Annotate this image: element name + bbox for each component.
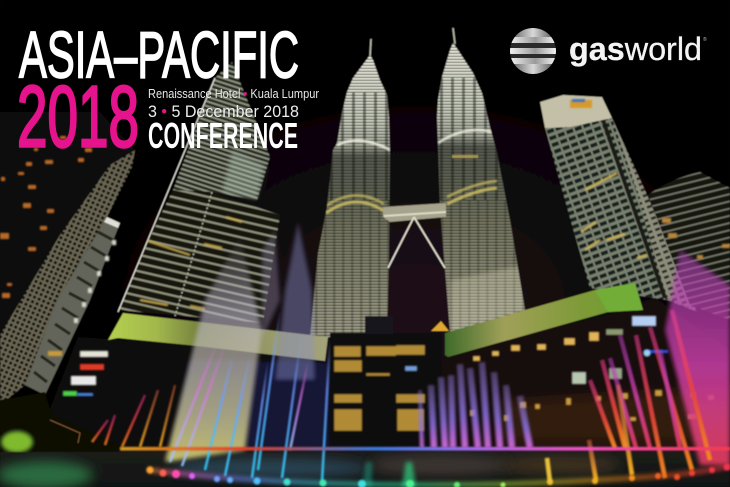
podium: left dark mall block [48, 337, 330, 452]
venue line: Renaissance Hotel • Kuala Lumpur [148, 86, 320, 101]
Petronas tower right [436, 27, 526, 332]
fountain: glow under the nozzle ring [148, 466, 730, 485]
building: central-left glass skyscraper [118, 62, 280, 323]
Petronas tower left [310, 38, 391, 338]
icon: gasworld striped globe [510, 28, 556, 74]
building: left tower grid facade [0, 150, 135, 405]
building: far-right round tower [648, 172, 730, 320]
fountain: right magenta plume [665, 250, 730, 465]
podium: right building with green roof [442, 283, 730, 452]
logo wordmark: gasworld: gasworld [569, 31, 702, 67]
building: left stepped side block [25, 217, 120, 395]
building: far-left dark tower with orange windows [0, 112, 135, 340]
skybridge with V supports [383, 203, 446, 268]
registered mark: ® [703, 36, 707, 43]
shoreline foliage with green lamp [0, 392, 120, 458]
fountain: left coloured jets [92, 310, 330, 482]
title: ASIA-PACIFIC: ASIA–PACIFIC [19, 18, 299, 92]
fountain: right red and orange jets [547, 310, 710, 482]
fountain: green jets in foreground [362, 462, 416, 487]
podium: central mall with gold windows [330, 316, 449, 453]
fountain: nozzle light ring [146, 464, 730, 487]
fountain: left pale plume [165, 222, 315, 462]
water surface with reflections [0, 452, 730, 487]
podium: blue haze behind left fountain [170, 360, 330, 448]
building: right curved tower [540, 95, 697, 312]
year: 2018: 2018 [17, 68, 139, 166]
podium: left green lit roof band [108, 313, 328, 361]
podium: illuminated store signs [63, 351, 108, 396]
fountain: far ledge light line [120, 447, 730, 450]
date line: 3 • 5 December 2018 [148, 102, 299, 121]
subtitle: CONFERENCE: CONFERENCE [148, 115, 298, 156]
fountain: centre purple jets [338, 362, 530, 448]
